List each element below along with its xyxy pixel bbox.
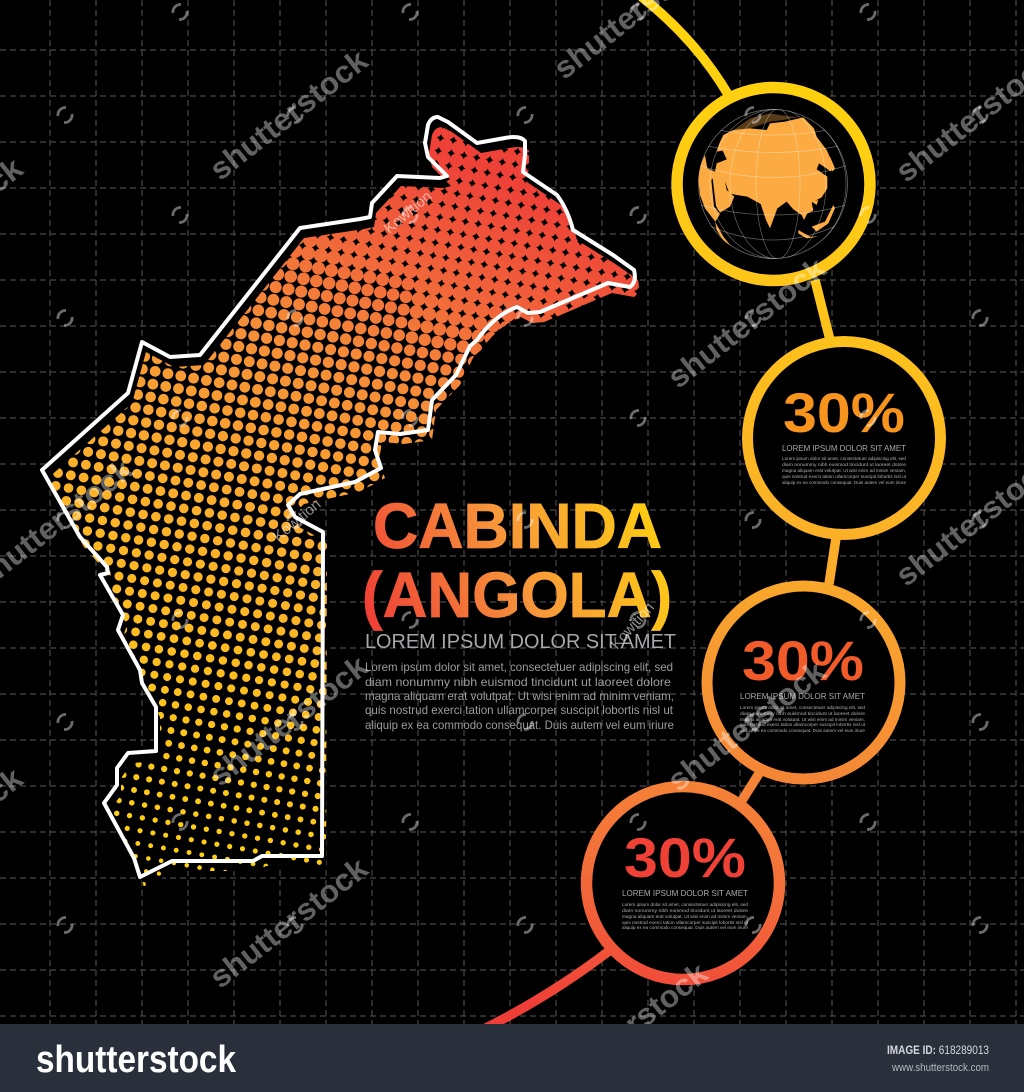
stat body text: Lorem ipsum dolor sit amet, consectetuer adipiscing elit, sed (740, 705, 865, 711)
map: Cabinda (40, 115, 639, 886)
title (362, 490, 672, 631)
stat body text: Lorem ipsum dolor sit amet, consectetuer adipiscing elit, sed (782, 456, 906, 462)
stat body text: aliquip ex ea commodo consequat. Duis autem vel eum iriure (740, 728, 865, 734)
contributor watermarks: Kowition (381, 188, 435, 237)
footer logo: shutterstock (36, 1039, 237, 1081)
stat heading: LOREM IPSUM DOLOR SIT AMET (622, 889, 748, 898)
contributor watermarks: Kowition (270, 496, 324, 545)
body text block: diam nonummy nibh euismod tincidunt ut laoreet dolore (365, 675, 671, 689)
title: CABINDA (373, 490, 662, 562)
contributor watermarks: Kowition (607, 599, 658, 653)
stat body text: quis nostrud exerci tation ullamcorper suscipit lobortis nisl ut (740, 722, 866, 728)
watermarks: shutterstock (203, 648, 375, 793)
stat body text: diam nonummy nibh euismod tincidunt ut laoreet dolore (782, 462, 906, 468)
stat body text (782, 456, 907, 486)
globe ring (677, 88, 870, 280)
watermark brackets (58, 4, 987, 933)
title: (ANGOLA) (362, 559, 672, 631)
stat body text (740, 705, 866, 734)
contributor watermarks (270, 188, 658, 653)
stat body text: Lorem ipsum dolor sit amet, consectetuer adipiscing elit, sed (622, 902, 748, 908)
icon: globe (698, 109, 848, 259)
map halftone dots (52, 127, 639, 886)
stat body text: quis nostrud exerci tation ullamcorper suscipit lobortis nisl ut (622, 920, 749, 926)
stat value: 30% (624, 826, 746, 889)
map black backing (42, 117, 639, 887)
stat body text (622, 902, 749, 931)
watermarks: shutterstock (661, 250, 833, 395)
continent land mass (698, 117, 833, 228)
stat value: 30% (742, 629, 864, 692)
globe grid lines (698, 109, 848, 259)
footer bar (0, 1024, 1024, 1092)
body text block: aliquip ex ea commodo consequat. Duis autem vel eum iriure (365, 718, 674, 732)
subtitle: LOREM IPSUM DOLOR SIT AMET (365, 630, 676, 653)
stat body text: aliquip ex ea commodo consequat. Duis autem vel eum iriure (622, 925, 748, 931)
body text block (365, 660, 674, 732)
stat body text: quis nostrud exerci tation ullamcorper suscipit lobortis nisl ut (782, 474, 907, 480)
connector line through rings (482, 0, 836, 1030)
body text block: Lorem ipsum dolor sit amet, consectetuer adipiscing elit, sed (365, 660, 673, 674)
image id: IMAGE ID: 618289013 (887, 1045, 989, 1057)
website: www.shutterstock.com (891, 1062, 989, 1074)
watermarks: shutterstock (661, 653, 833, 798)
stat heading: LOREM IPSUM DOLOR SIT AMET (782, 444, 906, 453)
watermarks: shutterstock (203, 850, 375, 995)
panel: stat ring 1 (748, 342, 940, 534)
watermarks: shutterstock (203, 42, 375, 187)
stat body text: diam nonummy nibh euismod tincidunt ut laoreet dolore (740, 711, 865, 717)
stat body text: magna aliquam erat volutpat. Ut wisi enim ad minim veniam, (622, 914, 748, 920)
stat body text: magna aliquam erat volutpat. Ut wisi enim ad minim veniam, (782, 468, 906, 474)
body text block: quis nostrud exerci tation ullamcorper suscipit lobortis nisl ut (365, 703, 674, 717)
stat heading: LOREM IPSUM DOLOR SIT AMET (740, 692, 865, 701)
panel: stat ring 3 (586, 786, 780, 980)
stat value: 30% (783, 381, 905, 444)
stat body text: diam nonummy nibh euismod tincidunt ut laoreet dolore (622, 908, 748, 914)
stat body text: magna aliquam erat volutpat. Ut wisi enim ad minim veniam, (740, 717, 865, 723)
stat body text: aliquip ex ea commodo consequat. Duis autem vel eum iriure (782, 480, 906, 486)
panel: stat ring 2 (707, 586, 900, 779)
map white outline (42, 117, 635, 877)
body text block: magna aliquam erat volutpat. Ut wisi enim ad minim veniam, (365, 689, 674, 703)
